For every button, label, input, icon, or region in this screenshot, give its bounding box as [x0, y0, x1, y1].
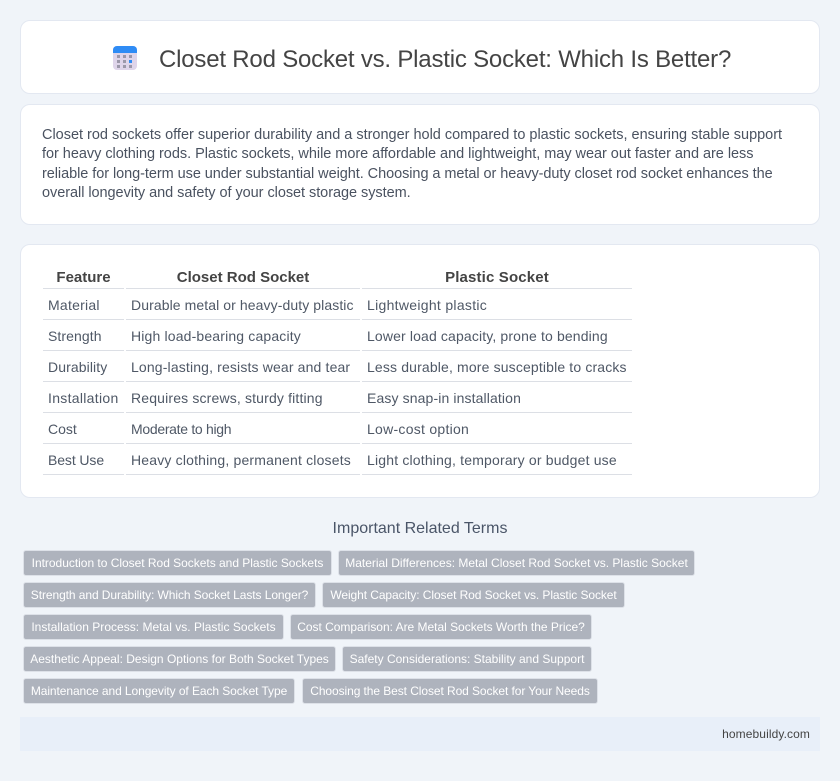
- panel: comparison table: [20, 244, 820, 498]
- table content: Low-cost option: [367, 421, 469, 437]
- tags: related terms: Choosing the Best Closet Rod Socket for Your Needs: [310, 684, 590, 698]
- tags: related terms: Safety Considerations: Stability and Support: [350, 652, 584, 666]
- table content: Requires screws, sturdy fitting: [131, 390, 323, 406]
- table content: Material: [48, 297, 100, 313]
- panel: description: [20, 104, 820, 225]
- table content: Plastic Socket: [445, 269, 549, 286]
- table content: High load-bearing capacity: [131, 328, 301, 344]
- table content: Cost: [48, 421, 77, 437]
- tags: related terms: Introduction to Closet Rod Sockets and Plastic Sockets: [32, 556, 323, 570]
- table content: Installation: [48, 390, 119, 406]
- text block: description: [42, 127, 782, 201]
- tags: related terms: Maintenance and Longevity of Each Socket Type: [31, 684, 287, 698]
- footer: [20, 717, 820, 751]
- table content: Moderate to high: [131, 421, 231, 437]
- table content: Light clothing, temporary or budget use: [367, 452, 617, 468]
- heading: related terms: Important Related Terms: [333, 520, 507, 537]
- text block: description: reliable for long-term use under substantial weight. Choosing a metal or heavy-duty closet rod socket enhances the: [42, 166, 773, 182]
- tags: related terms: Material Differences: Metal Closet Rod Socket vs. Plastic Socket: [345, 556, 688, 570]
- text block: description: Closet rod sockets offer superior durability and a stronger hold compared to plastic sockets, ensuring stable support: [42, 127, 782, 143]
- footer source text: homebuildy.com: [722, 727, 810, 741]
- table content: Strength: [48, 328, 102, 344]
- table content: Long-lasting, resists wear and tear: [131, 359, 350, 375]
- tags: related terms: Installation Process: Metal vs. Plastic Sockets: [31, 620, 276, 634]
- table content: Closet Rod Socket: [177, 269, 309, 286]
- tags: related terms: Cost Comparison: Are Metal Sockets Worth the Price?: [297, 620, 585, 634]
- tags: related terms: [23, 550, 695, 704]
- text block: description: for heavy clothing rods. Plastic sockets, while more affordable and lightweight, may wear out faster and are less: [42, 146, 753, 162]
- title: Closet Rod Socket vs. Plastic Socket: Which Is Better?: [159, 46, 731, 73]
- tags: related terms: Strength and Durability: Which Socket Lasts Longer?: [31, 588, 308, 602]
- table content: Less durable, more susceptible to cracks: [367, 359, 627, 375]
- table content: Easy snap-in installation: [367, 390, 521, 406]
- table content: Durability: [48, 359, 107, 375]
- text block: description: overall longevity and safety of your closet storage system.: [42, 185, 411, 201]
- table content: Lightweight plastic: [367, 297, 487, 313]
- tags: related terms: Weight Capacity: Closet Rod Socket vs. Plastic Socket: [330, 588, 617, 602]
- table content: Durable metal or heavy-duty plastic: [131, 297, 354, 313]
- icon: calendar: [113, 46, 137, 70]
- table content: Lower load capacity, prone to bending: [367, 328, 608, 344]
- tags: related terms: Aesthetic Appeal: Design Options for Both Socket Types: [30, 652, 329, 666]
- table content: Best Use: [48, 452, 104, 468]
- table content: Feature: [56, 269, 111, 286]
- table content: Heavy clothing, permanent closets: [131, 452, 351, 468]
- panel: title header: [20, 20, 820, 94]
